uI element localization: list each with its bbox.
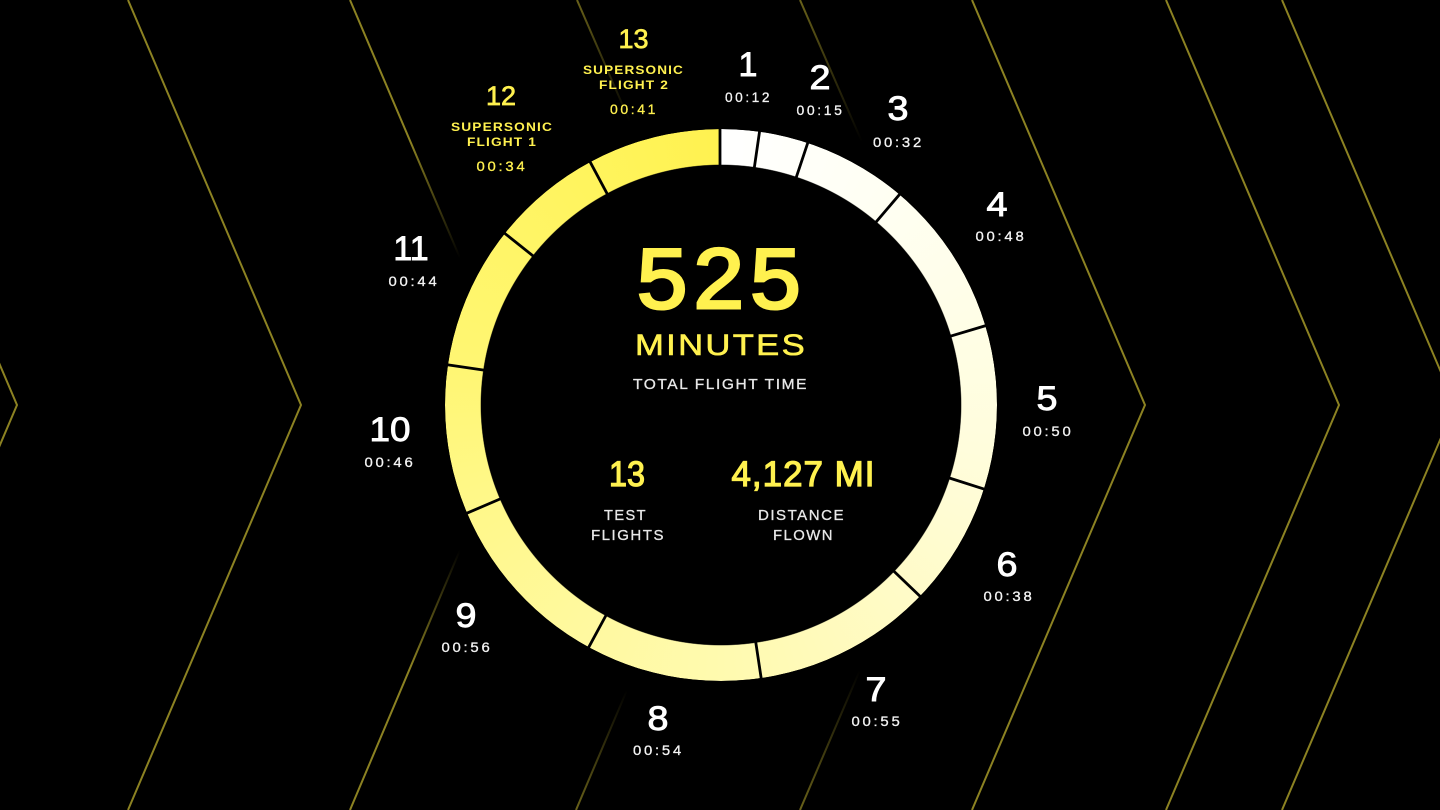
flight 13 label: supersonic flight 2 [583, 24, 684, 117]
flight 12 label: supersonic flight 1: 00:34 [476, 158, 528, 174]
flight 7 label [852, 671, 902, 729]
flight 13 label: supersonic flight 2: SUPERSONIC [583, 63, 684, 77]
flight 11 label [388, 230, 440, 289]
centre stat: 525 minutes: TOTAL FLIGHT TIME [633, 376, 808, 393]
stat: distance flown: FLOWN [773, 527, 834, 544]
flight 7 label: 00:55 [852, 713, 902, 729]
flight 5 label: 00:50 [1022, 423, 1074, 439]
flight 7 label: 7 [866, 671, 886, 709]
flight 6 label [984, 546, 1034, 604]
stat: distance flown: 4,127 MI [732, 455, 876, 494]
flight 1 label [725, 46, 772, 105]
centre stat: 525 minutes: 525 [637, 232, 807, 327]
flight 4 label [976, 186, 1026, 244]
flight 1 label: 1 [739, 46, 757, 84]
flight 9 label: 00:56 [442, 639, 492, 655]
stat: test flights: FLIGHTS [591, 527, 665, 544]
centre stat: 525 minutes [633, 232, 808, 393]
flight 8 label: 8 [648, 700, 668, 738]
flight 12 label: supersonic flight 1: 12 [486, 81, 516, 111]
flight 11 label: 11 [393, 230, 429, 268]
flight 8 label [633, 700, 684, 758]
stat: distance flown [732, 455, 876, 544]
flight 13 label: supersonic flight 2: FLIGHT 2 [599, 78, 669, 92]
flight 8 label: 00:54 [633, 742, 684, 758]
flight 12 label: supersonic flight 1 [451, 81, 553, 174]
stat: test flights: 13 [609, 455, 645, 494]
flight 10 label [364, 411, 416, 470]
stat: test flights: TEST [604, 507, 647, 524]
flight 2 label: 2 [810, 59, 830, 97]
flight 12 label: supersonic flight 1: FLIGHT 1 [467, 135, 537, 149]
flight 6 label: 00:38 [984, 588, 1034, 604]
flight 2 label [796, 59, 844, 118]
flight 4 label: 00:48 [976, 228, 1026, 244]
flight 10 label: 10 [370, 411, 410, 449]
flight time ring [444, 129, 996, 681]
flight 1 label: 00:12 [725, 89, 772, 105]
flight 3 label [873, 90, 924, 150]
flight 3 label: 00:32 [873, 134, 924, 150]
centre stat: 525 minutes: MINUTES [635, 329, 807, 362]
flight 5 label: 5 [1036, 380, 1058, 418]
flight 12 label: supersonic flight 1: SUPERSONIC [451, 120, 553, 134]
flight 9 label: 9 [456, 597, 476, 635]
flight 9 label [442, 597, 492, 655]
stat: distance flown: DISTANCE [758, 507, 845, 524]
stat: test flights [591, 455, 665, 544]
flight 3 label: 3 [888, 90, 908, 128]
flight 5 label [1022, 380, 1074, 439]
flight 4 label: 4 [986, 186, 1008, 224]
flight 13 label: supersonic flight 2: 13 [618, 24, 649, 54]
flight 6 label: 6 [996, 546, 1018, 584]
flight 13 label: supersonic flight 2: 00:41 [610, 101, 658, 117]
flight 10 label: 00:46 [364, 454, 416, 470]
flight 2 label: 00:15 [796, 102, 844, 118]
flight 11 label: 00:44 [388, 273, 440, 289]
